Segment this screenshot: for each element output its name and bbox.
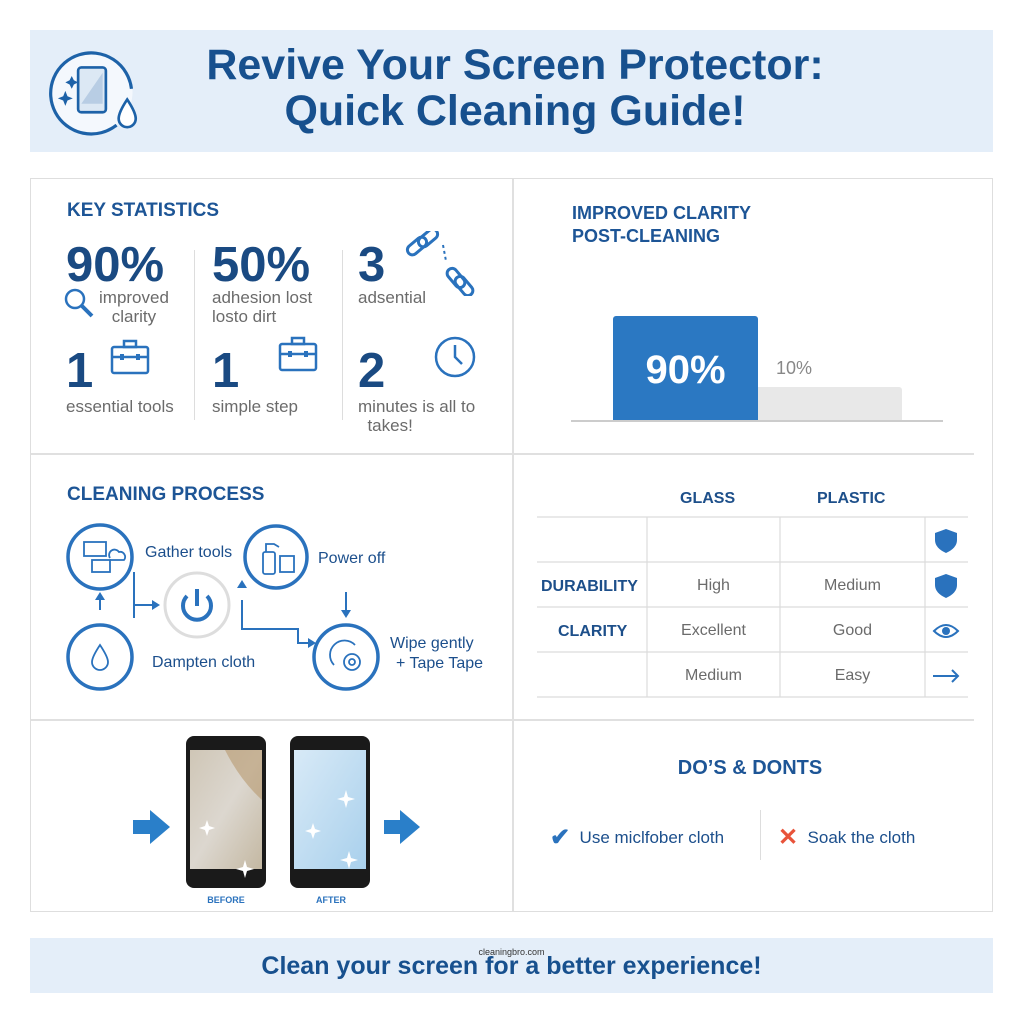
panel: cleaning process: + Tape Tape: [396, 655, 483, 672]
bar 90%: [613, 316, 758, 420]
footer band: cleaningbro.com: [478, 947, 545, 957]
panel: comparison table: Medium: [824, 577, 881, 594]
footer band: [30, 938, 993, 993]
heading: CLEANING PROCESS: [67, 484, 264, 505]
footer band: Clean your screen for a better experience!: [261, 952, 762, 980]
stat 50%: adhesion lost: [212, 288, 312, 307]
header band: [30, 30, 993, 152]
do item: ✔ Use miclfober cloth: [550, 824, 724, 851]
heading: KEY STATISTICS: [67, 200, 219, 221]
stat 3: 3: [358, 238, 385, 292]
stat 1 step: [212, 336, 318, 416]
stat 90%: 90%: [66, 238, 164, 292]
panel: before/after: [133, 736, 420, 905]
panel: improved clarity chart: [571, 203, 943, 422]
stat 1 step: 1: [212, 344, 239, 398]
stat 2 minutes: takes!: [367, 416, 413, 435]
title: Quick Cleaning Guide!: [284, 87, 746, 135]
stat 3: adsential: [358, 288, 426, 307]
panel: cleaning process: Power off: [318, 550, 386, 567]
panel: comparison table: High: [697, 577, 730, 594]
stat 50%: losto dirt: [212, 307, 276, 326]
panel: cleaning process: [66, 484, 483, 691]
stat 1 step: simple step: [212, 397, 298, 416]
heading: POST-CLEANING: [572, 226, 720, 246]
panel: comparison table: PLASTIC: [817, 490, 885, 507]
bar 10%: [758, 387, 902, 420]
panel: comparison table: CLARITY: [558, 623, 627, 640]
stat 90%: improved: [99, 288, 169, 307]
stat 90%: clarity: [112, 307, 156, 326]
heading: DO’S & DONTS: [678, 757, 822, 779]
panel: comparison table: GLASS: [680, 490, 735, 507]
stat 1 tools: essential tools: [66, 397, 174, 416]
stat 1 tools: 1: [66, 344, 93, 398]
panel: comparison table: Excellent: [681, 622, 746, 639]
stat 2 minutes: 2: [358, 344, 385, 398]
panel: key statistics: [64, 200, 476, 435]
stat 90%: [64, 238, 169, 326]
title: Revive Your Screen Protector:: [206, 41, 824, 89]
panel: improved clarity chart: 10%: [776, 358, 812, 378]
panel: comparison table: DURABILITY: [541, 578, 638, 595]
dont item: ✕ Soak the cloth: [778, 824, 915, 851]
heading: IMPROVED CLARITY: [572, 203, 751, 223]
bar 90%: 90%: [645, 348, 726, 392]
arrows: [133, 810, 170, 844]
stat 1 tools: [66, 340, 174, 416]
title: [206, 41, 824, 135]
panel: do's and donts: [550, 757, 915, 860]
power circle: [165, 573, 229, 637]
panel: cleaning process: Dampten cloth: [152, 654, 255, 671]
panel: before/after: AFTER: [316, 895, 346, 905]
stat 3: [358, 231, 474, 307]
stat 50%: 50%: [212, 238, 310, 292]
panel: cleaning process: Gather tools: [145, 544, 232, 561]
icon: phone with drop: [49, 51, 138, 136]
main panel: [30, 178, 993, 912]
panel: comparison table: Easy: [835, 667, 870, 684]
stat 2 minutes: minutes is all to: [358, 397, 475, 416]
stat 2 minutes: [358, 336, 476, 435]
panel: comparison table: Medium: [685, 667, 742, 684]
panel: cleaning process: Wipe gently: [390, 635, 474, 652]
panel: comparison table: [537, 490, 968, 698]
stat 50%: [212, 238, 312, 326]
heading: [572, 203, 751, 246]
panel: before/after: BEFORE: [207, 895, 245, 905]
panel: comparison table: Good: [833, 622, 872, 639]
